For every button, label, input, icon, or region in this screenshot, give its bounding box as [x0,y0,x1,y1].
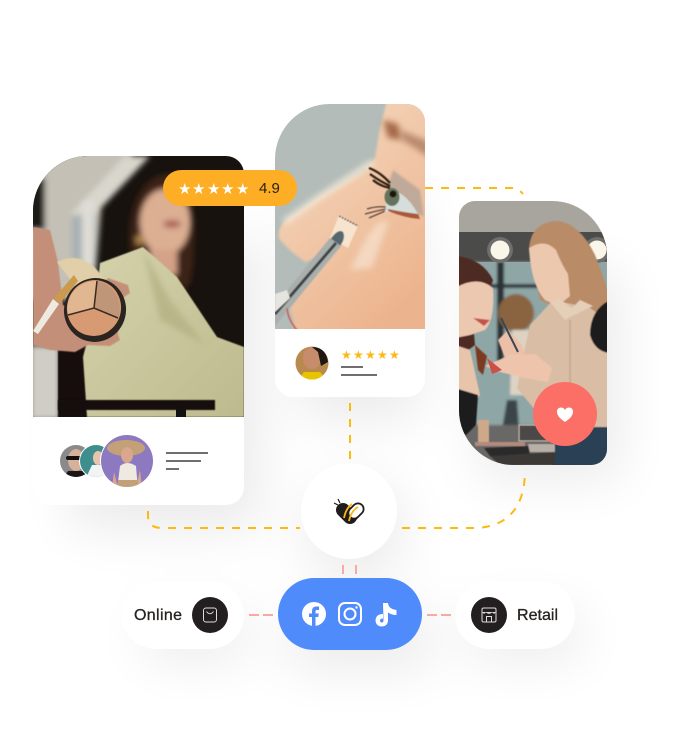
rating stars: ★ [365,348,376,362]
rating pill: 4.9 [259,180,280,197]
retail pill: Retail [517,607,558,624]
avatar [296,346,328,380]
panel: center card [275,100,430,397]
rating stars: ★ [341,348,352,362]
icon: bee heart logo [334,499,358,521]
photo: eye makeup brush [275,100,430,335]
rating pill: ★ [221,181,234,198]
panel: left card [28,150,244,505]
connector: pink dashed lines [249,565,451,615]
rating pill: ★ [178,181,191,198]
avatars [59,434,154,490]
icon: store [471,597,507,633]
rating pill: ★ [236,181,249,198]
rating stars: ★ [353,348,364,362]
rating stars: ★ [377,348,388,362]
photo: makeup artist with palette [28,150,244,420]
rating pill [163,170,297,206]
icon: shopping bag [192,597,228,633]
left woman [455,256,493,435]
icon: tiktok [376,603,396,626]
connector: yellow dashed lines [148,188,525,528]
online pill: Online [134,607,182,624]
icon: instagram [339,603,361,625]
rating stars: ★ [389,348,400,362]
rating stars [341,348,400,362]
retail pill [455,581,575,649]
center logo circle [301,463,397,559]
social media pill [278,578,422,650]
panel: right photo card [455,201,610,470]
table [475,420,555,465]
soft shadows [70,200,620,670]
heart button [533,382,597,446]
rating pill: ★ [207,181,220,198]
right woman [485,221,610,470]
rating pill: ★ [192,181,205,198]
text placeholder lines [341,366,377,376]
online pill [122,581,244,649]
lights [487,237,513,263]
icon: facebook [302,602,326,626]
text placeholder lines [166,452,208,470]
